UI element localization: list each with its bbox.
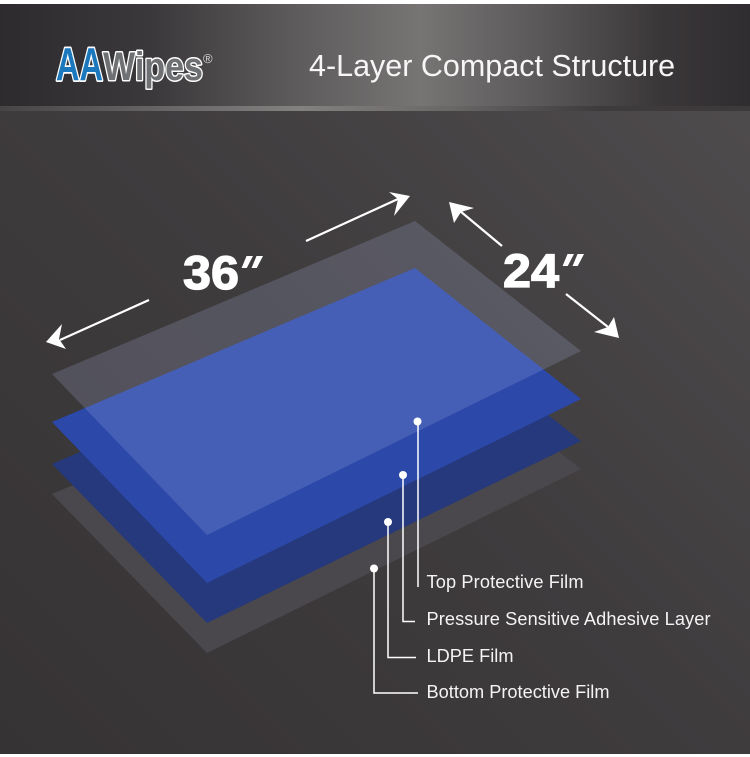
logo: AAWipes: Wipes [103, 45, 203, 89]
callout: bottom protective film [370, 564, 610, 702]
dimension: 24 inch [503, 243, 592, 297]
dimension: 24 inch: 24 [503, 244, 559, 297]
title: 4-Layer Compact Structure [309, 49, 675, 83]
layer: bottom protective film [52, 339, 581, 653]
layer: LDPE film [52, 309, 581, 623]
logo: AAWipes: ® [203, 51, 213, 66]
dimension: 36 inch: 36 [183, 246, 239, 299]
layer: pressure sensitive adhesive [52, 268, 581, 583]
callout: top protective film: Top Protective Film [426, 572, 584, 592]
callout: top protective film [414, 418, 584, 592]
callout: LDPE film [384, 518, 514, 666]
callout: pressure sensitive adhesive layer: Pressure Sensitive Adhesive Layer [426, 609, 710, 629]
arrow: 36 inch right [306, 192, 410, 241]
logo: AAWipes: AA [56, 38, 103, 90]
arrow: 24 inch up [449, 202, 502, 246]
logo: AAWipes [56, 38, 213, 90]
layer: top protective film [52, 221, 581, 535]
callout: LDPE film: LDPE Film [426, 646, 514, 666]
arrow: 36 inch left [46, 300, 149, 349]
arrow: 24 inch down [566, 294, 619, 338]
header band [0, 4, 750, 111]
dimension: 24 inch: " [544, 243, 592, 297]
callout: bottom protective film: Bottom Protective Film [426, 682, 610, 702]
dimension: 36 inch: " [223, 245, 271, 299]
callout: pressure sensitive adhesive layer [399, 471, 710, 629]
dimension: 36 inch [46, 245, 271, 349]
